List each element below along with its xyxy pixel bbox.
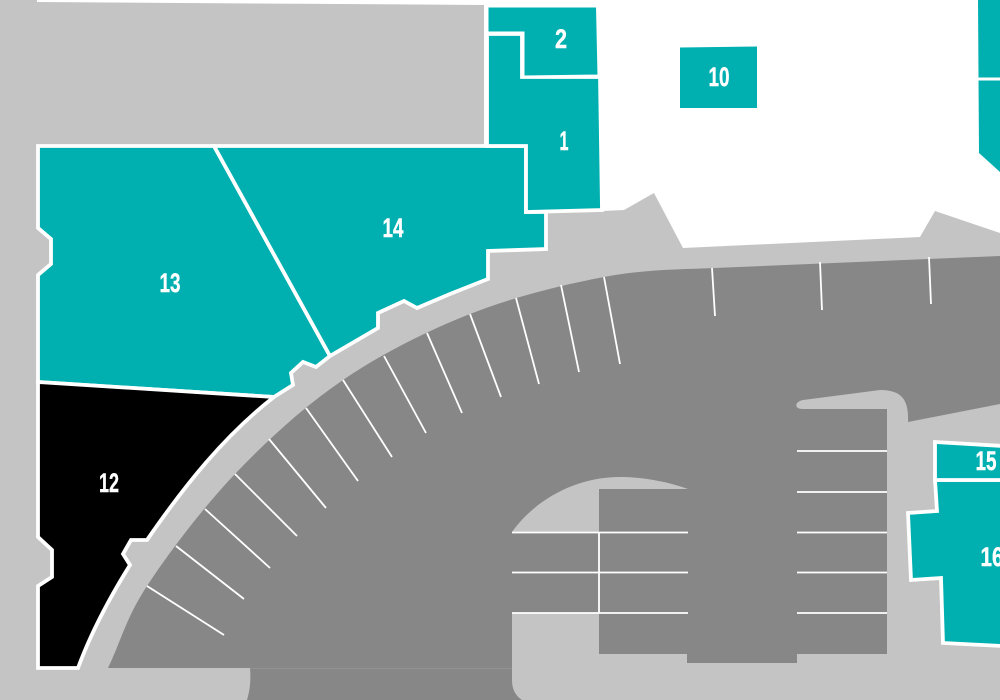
parking lot lower driveway	[247, 668, 522, 700]
parking stall lines	[147, 257, 931, 635]
unit 16	[908, 480, 1000, 646]
unit 14: 14	[382, 213, 404, 243]
right edge unit	[977, 0, 1000, 172]
parking lot surface	[108, 256, 1000, 668]
parking bays left of centre block	[512, 532, 600, 613]
unit 10	[680, 46, 757, 108]
unit 15	[935, 442, 1000, 480]
unit 13	[38, 146, 330, 397]
unit 1	[487, 34, 602, 212]
unit 12: 12	[99, 468, 119, 498]
unit 14	[214, 146, 546, 356]
unit 2	[487, 6, 599, 77]
white open area at top right	[484, 0, 1000, 248]
unit 1: 1	[560, 126, 568, 156]
driveway seam	[250, 668, 512, 670]
unit 12	[38, 382, 274, 668]
unit 2: 2	[555, 24, 567, 54]
unit 10: 10	[708, 62, 730, 92]
unit 13: 13	[160, 268, 180, 298]
white top edge strip	[37, 0, 485, 5]
